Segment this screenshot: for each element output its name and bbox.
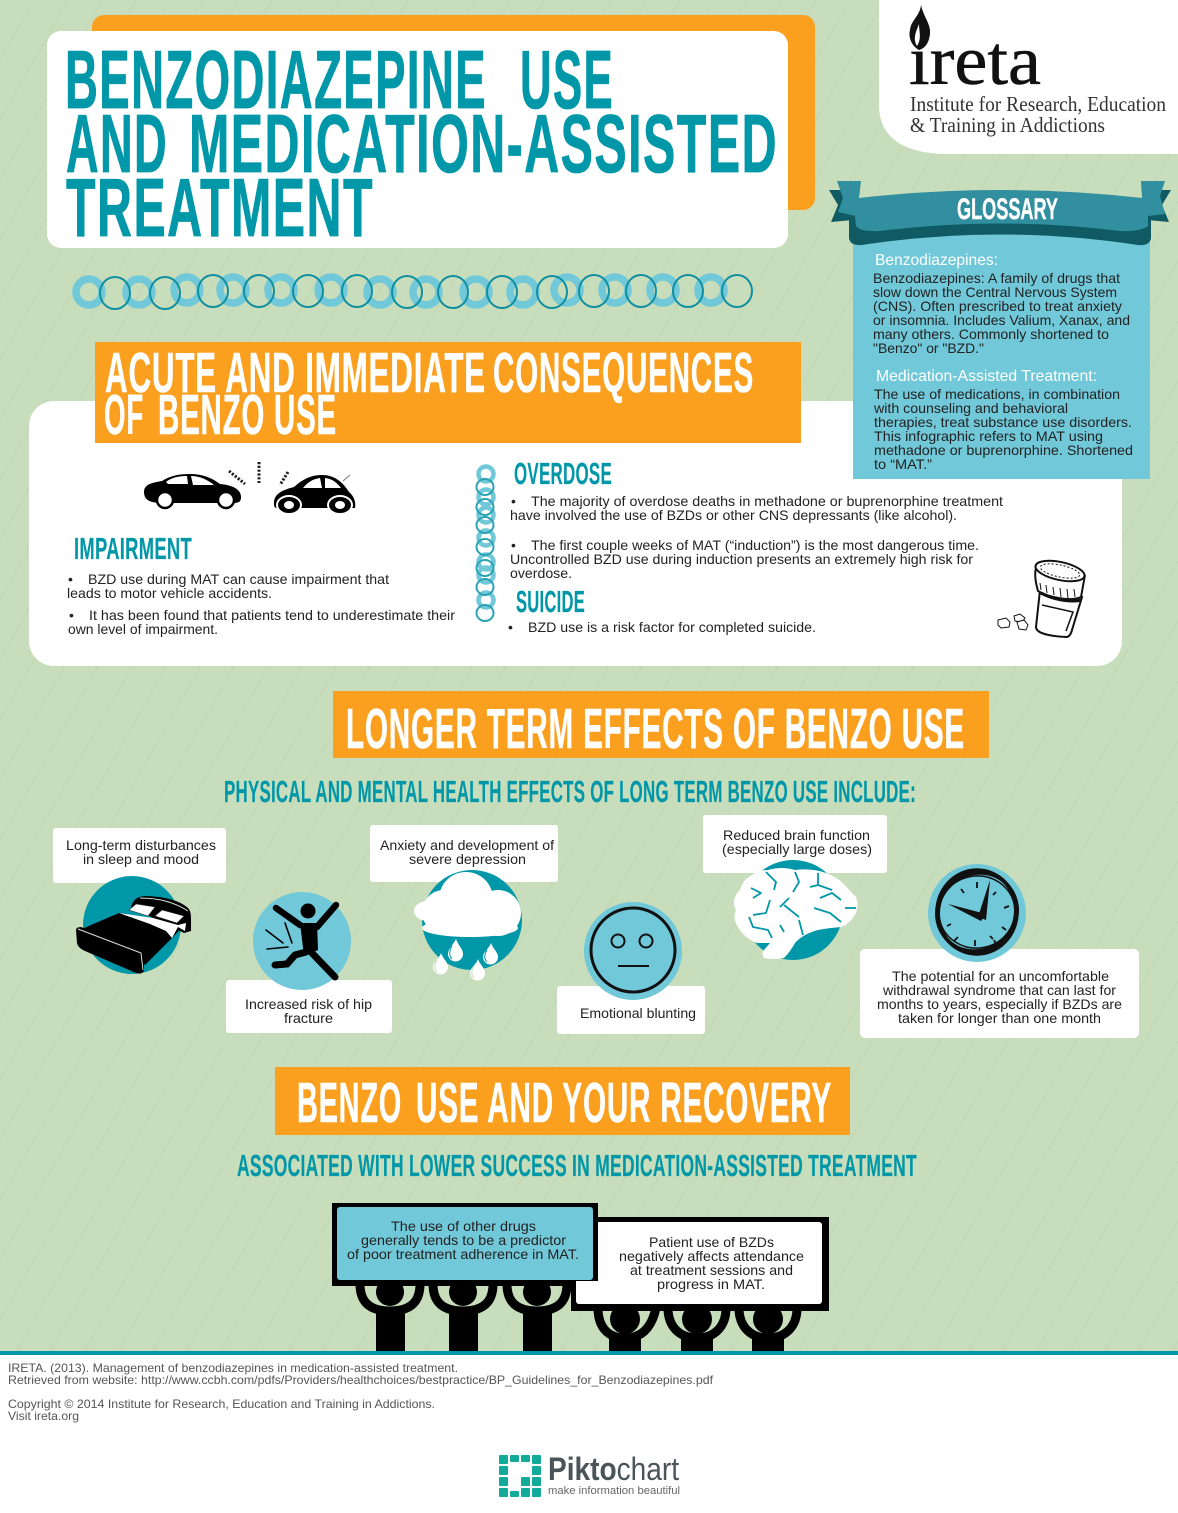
caption card bbox=[226, 980, 392, 1033]
decorative vertical ring chain bbox=[476, 466, 494, 621]
caption card: months to years, especially if BZDs are bbox=[877, 996, 1122, 1012]
heading: benzo use and your recovery bbox=[275, 1067, 850, 1135]
text block: suicide: BZD use is a risk factor for completed suicide. bbox=[528, 619, 816, 635]
references: Retrieved from website: http://www.ccbh.com/pdfs/Providers/healthchoices/bestpractice/BP_Guidelines_for_Benzodiazepines.pdf bbox=[8, 1373, 714, 1387]
text block: overdose: have involved the use of BZDs or other CNS depressants (like alcohol). bbox=[510, 507, 957, 523]
title block: MEDICATION-ASSISTED bbox=[189, 97, 778, 190]
glossary term: benzodiazepines: "Benzo" or "BZD." bbox=[873, 340, 984, 356]
references: IRETA. (2013). Management of benzodiazepines in medication-assisted treatment. bbox=[8, 1361, 458, 1375]
glossary term: medication-assisted treatment: The use of medications, in combination bbox=[874, 386, 1120, 402]
heading: acute consequences bbox=[95, 341, 801, 447]
references: Visit ireta.org bbox=[8, 1409, 79, 1423]
effect: emotional blunting bbox=[557, 902, 705, 1034]
icon: colliding cars bbox=[144, 462, 355, 514]
text block: overdose: Uncontrolled BZD use during induction presents an extremely high risk for bbox=[510, 551, 973, 567]
panel: glossary bbox=[829, 181, 1171, 479]
icon: pill bottle bbox=[998, 557, 1086, 637]
text block: impairment: BZD use during MAT can cause impairment that bbox=[88, 571, 389, 587]
caption card: Reduced brain function bbox=[723, 827, 870, 843]
icon: brain bbox=[734, 868, 858, 959]
heading: acute consequences: OF bbox=[104, 383, 144, 447]
text block: overdose: The majority of overdose deaths in methadone or buprenorphine treatment bbox=[531, 493, 1003, 509]
text block: impairment bbox=[67, 531, 455, 637]
caption card: severe depression bbox=[409, 851, 526, 867]
title block: AND bbox=[66, 97, 168, 190]
sign: other drugs bbox=[332, 1203, 600, 1291]
text block: suicide: • bbox=[508, 619, 513, 635]
sign: other drugs: The use of other drugs bbox=[391, 1218, 536, 1234]
glossary term: medication-assisted treatment: to “MAT.” bbox=[874, 456, 932, 472]
figures: right group bbox=[598, 1304, 797, 1351]
caption card: fracture bbox=[284, 1010, 333, 1026]
logo: piktochart: make information beautiful bbox=[548, 1485, 680, 1497]
glossary term: medication-assisted treatment: therapies, treat substance use disorders. bbox=[874, 414, 1132, 430]
glossary term: benzodiazepines: slow down the Central Nervous System bbox=[873, 284, 1117, 300]
text block: overdose: • bbox=[511, 493, 516, 509]
logo: ireta bbox=[879, 0, 1178, 154]
glossary ribbon banner bbox=[829, 181, 1171, 245]
glossary term: medication-assisted treatment bbox=[873, 368, 1133, 472]
effect: sleep and mood bbox=[53, 828, 226, 974]
effect: withdrawal syndrome bbox=[860, 858, 1139, 1038]
heading: benzo use and your recovery: BENZO bbox=[297, 1071, 402, 1135]
text block: impairment: IMPAIRMENT bbox=[74, 531, 192, 566]
sign: patient use of BZDs bbox=[571, 1217, 829, 1311]
title block: BENZODIAZEPINE bbox=[65, 33, 487, 126]
logo: piktochart: Piktochart bbox=[548, 1451, 679, 1487]
icon: neutral face bbox=[591, 908, 675, 992]
people holding signs bbox=[332, 1203, 829, 1351]
references: Copyright © 2014 Institute for Research, Education and Training in Addictions. bbox=[8, 1397, 435, 1411]
logo: piktochart bbox=[499, 1451, 680, 1497]
text block: impairment: • bbox=[68, 571, 73, 587]
title block bbox=[47, 15, 815, 254]
glossary term: medication-assisted treatment: This infographic refers to MAT using bbox=[874, 428, 1103, 444]
logo: ireta: ireta bbox=[909, 23, 1041, 100]
text block: impairment: It has been found that patients tend to underestimate their bbox=[89, 607, 455, 623]
caption card: taken for longer than one month bbox=[898, 1010, 1101, 1026]
icon: bed bbox=[76, 896, 191, 974]
figures: left group bbox=[360, 1278, 567, 1351]
heading: acute consequences: BENZO USE bbox=[158, 383, 337, 447]
glossary term: benzodiazepines: many others. Commonly shortened to bbox=[873, 326, 1109, 342]
glossary term: medication-assisted treatment: methadone or buprenorphine. Shortened bbox=[874, 442, 1133, 458]
caption card: (especially large doses) bbox=[722, 841, 872, 857]
text block: impairment: own level of impairment. bbox=[68, 621, 218, 637]
sign: other drugs: of poor treatment adherence in MAT. bbox=[347, 1246, 579, 1262]
text block: overdose: overdose. bbox=[510, 565, 572, 581]
glossary term: benzodiazepines: Benzodiazepines: bbox=[875, 252, 998, 269]
text block: overdose: OVERDOSE bbox=[514, 456, 612, 491]
effect: anxiety and depression bbox=[370, 825, 558, 980]
glossary term: benzodiazepines: or insomnia. Includes Valium, Xanax, and bbox=[873, 312, 1130, 328]
caption card: Long-term disturbances bbox=[66, 837, 216, 853]
text block: suicide bbox=[508, 584, 816, 635]
sign: patient use of BZDs: negatively affects attendance bbox=[619, 1248, 804, 1264]
text block: overdose: The first couple weeks of MAT (“induction”) is the most dangerous time. bbox=[531, 537, 979, 553]
glossary ribbon banner: GLOSSARY bbox=[957, 193, 1058, 226]
glossary term: medication-assisted treatment: with counseling and behavioral bbox=[873, 400, 1068, 416]
caption card: Increased risk of hip bbox=[245, 996, 372, 1012]
glossary term: benzodiazepines bbox=[873, 252, 1130, 356]
caption card: withdrawal syndrome that can last for bbox=[882, 982, 1116, 998]
logo: ireta: & Training in Addictions bbox=[910, 113, 1105, 137]
caption card: Anxiety and development of bbox=[380, 837, 554, 853]
caption card bbox=[370, 825, 558, 882]
effect: hip fracture bbox=[226, 892, 392, 1033]
text block: impairment: leads to motor vehicle accidents. bbox=[67, 585, 272, 601]
glossary term: medication-assisted treatment: Medication-Assisted Treatment: bbox=[876, 368, 1097, 385]
title block: USE bbox=[520, 33, 614, 126]
glossary term: benzodiazepines: Benzodiazepines: A family of drugs that bbox=[873, 270, 1120, 286]
caption card bbox=[703, 815, 887, 873]
sign: patient use of BZDs: Patient use of BZDs bbox=[649, 1234, 774, 1250]
text block: suicide: SUICIDE bbox=[516, 584, 585, 619]
caption card: The potential for an uncomfortable bbox=[892, 968, 1109, 984]
text block: overdose: • bbox=[511, 537, 516, 553]
caption card bbox=[53, 828, 226, 883]
footer bbox=[0, 1351, 1178, 1513]
caption card: Emotional blunting bbox=[580, 1005, 696, 1021]
icon: rain cloud bbox=[414, 872, 521, 980]
heading: acute consequences: CONSEQUENCES bbox=[493, 341, 754, 405]
caption card bbox=[860, 949, 1139, 1038]
text block: overdose bbox=[510, 456, 1003, 581]
icon: falling figure bbox=[266, 904, 336, 977]
heading: acute consequences: ACUTE AND IMMEDIATE bbox=[105, 341, 486, 405]
caption card: in sleep and mood bbox=[83, 851, 199, 867]
panel: acute and immediate consequences bbox=[29, 341, 1122, 666]
decorative ring chain bbox=[76, 275, 752, 309]
text block: impairment: • bbox=[69, 607, 74, 623]
sign: patient use of BZDs: progress in MAT. bbox=[657, 1276, 765, 1292]
references bbox=[8, 1361, 714, 1423]
sign: patient use of BZDs: at treatment sessions and bbox=[630, 1262, 793, 1278]
caption card bbox=[557, 986, 705, 1034]
sign: other drugs: generally tends to be a predictor bbox=[361, 1232, 566, 1248]
icon: scribbled clock bbox=[922, 858, 1032, 966]
glossary term: benzodiazepines: (CNS). Often prescribed to treat anxiety bbox=[873, 298, 1122, 314]
effect: reduced brain function bbox=[703, 815, 887, 960]
title block: TREATMENT bbox=[66, 161, 374, 254]
